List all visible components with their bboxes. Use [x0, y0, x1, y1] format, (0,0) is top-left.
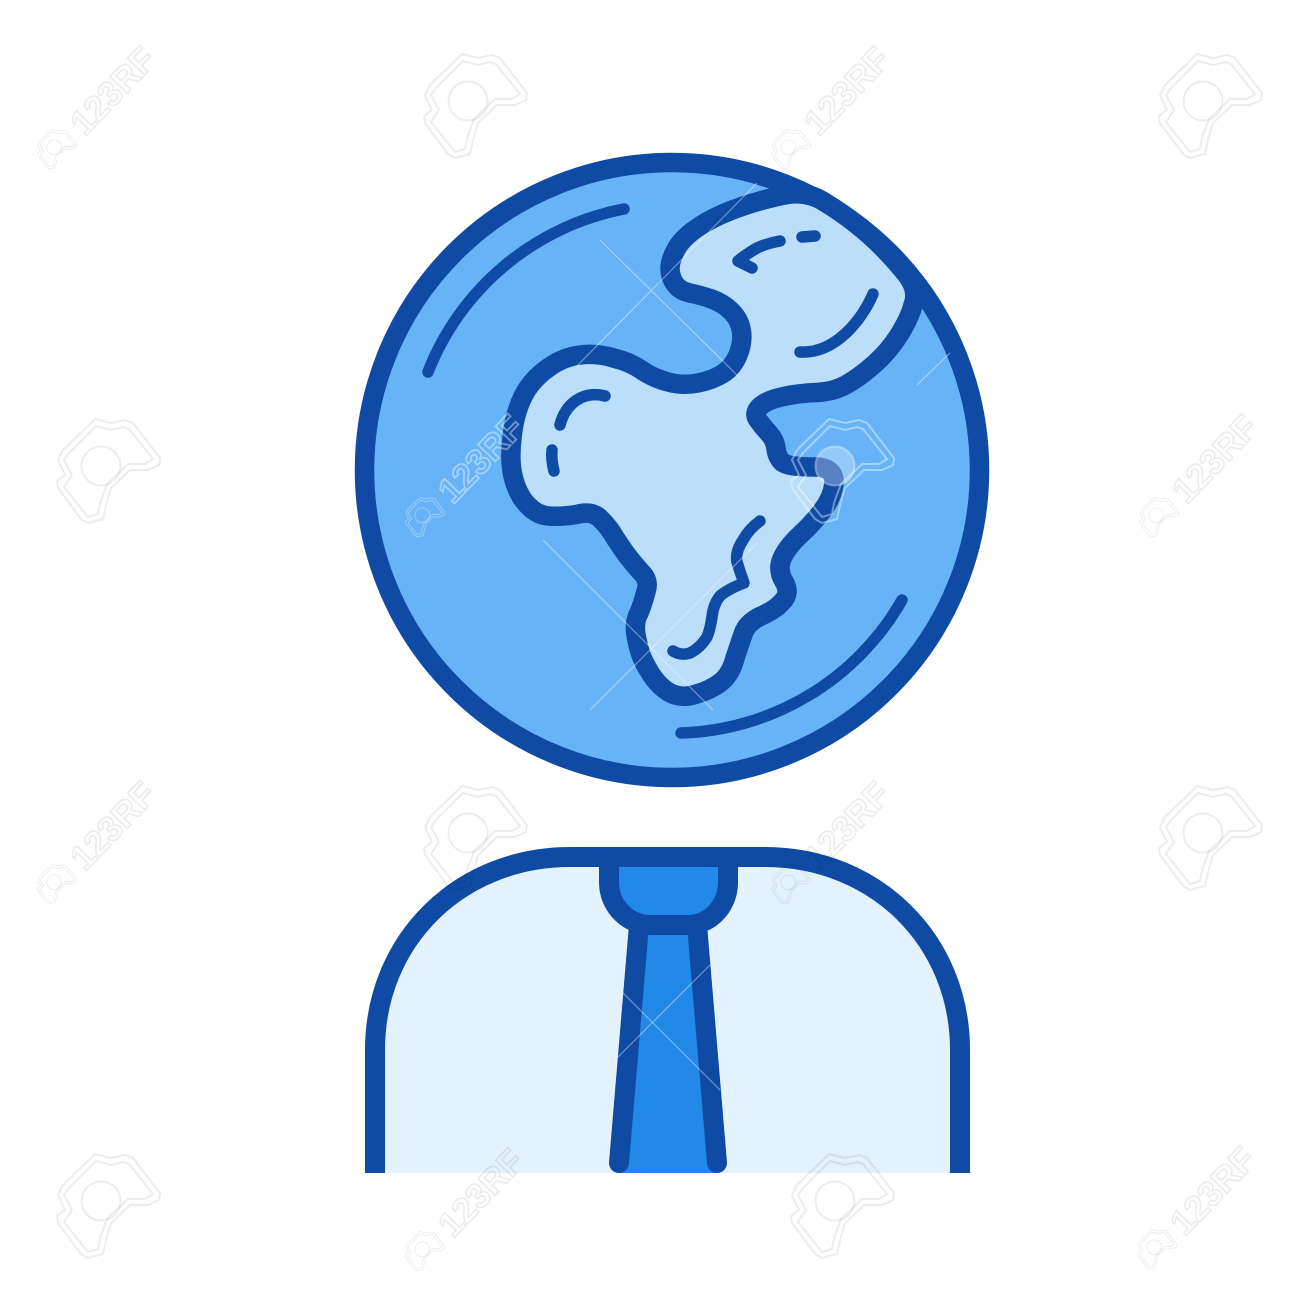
watermark: 123RF text: 123RF	[431, 408, 532, 511]
watermark over globe	[406, 408, 894, 537]
watermark: 123RF text: 123RF	[431, 1142, 532, 1245]
crosshair lines of the watermark	[543, 183, 950, 1090]
small logo over globe	[406, 497, 445, 537]
tie blade	[619, 925, 717, 1173]
watermark: 123RF text: 123RF	[797, 775, 898, 878]
globe disc	[364, 162, 980, 778]
highlight arcs and land details	[428, 209, 902, 733]
watermark: 123RF text: 123RF	[63, 40, 164, 143]
globe	[364, 162, 980, 778]
continents	[511, 194, 915, 696]
watermark: 123RF text: 123RF	[63, 775, 164, 878]
shirt	[375, 857, 960, 1173]
123RF text over globe: 123RF	[431, 408, 532, 511]
watermark: 123RF text: 123RF	[1165, 408, 1266, 511]
watermark: 123RF text: 123RF	[1163, 1140, 1264, 1243]
watermark: 123RF text: 123RF	[797, 40, 898, 143]
body	[375, 857, 960, 1173]
watermark: small logos	[38, 129, 1179, 1271]
tie knot	[609, 857, 728, 925]
egg logo over globe	[791, 419, 894, 523]
